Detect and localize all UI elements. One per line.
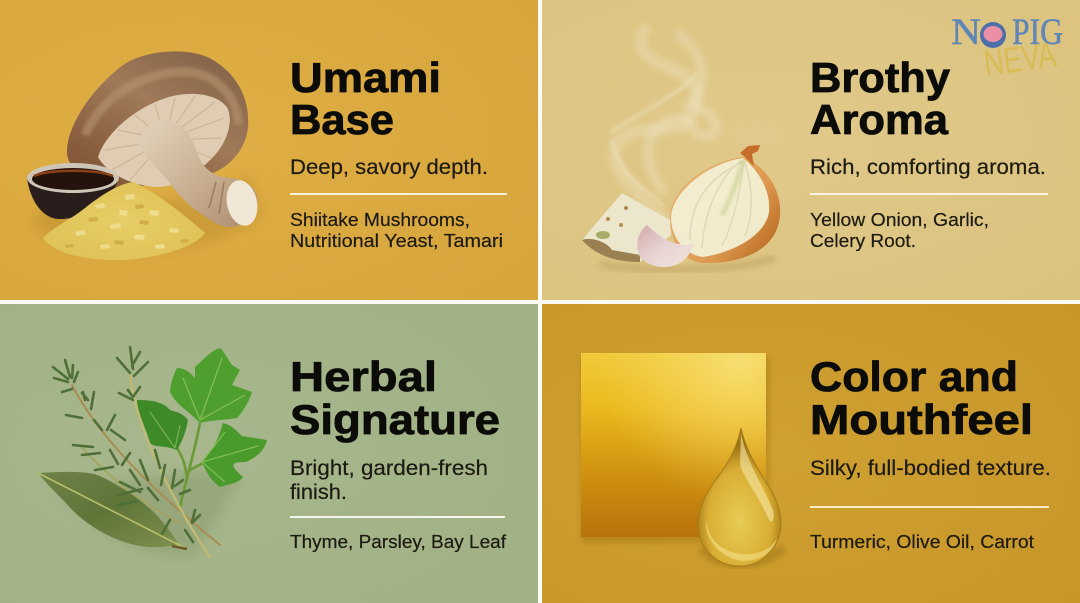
ingredients: Celery Root. [810, 231, 916, 251]
onion [670, 145, 780, 263]
heading: Herbal [290, 353, 437, 400]
mushroom cap [67, 51, 248, 190]
illustration: thyme, parsley and bay leaf [38, 347, 267, 557]
description: Bright, garden-fresh [290, 457, 488, 480]
ingredients: Yellow Onion, Garlic, [810, 210, 989, 230]
mushroom stem [137, 120, 257, 227]
logo: No Pig Neva: NEVA [981, 33, 1058, 84]
ingredients: Shiitake Mushrooms, [290, 210, 470, 230]
garlic clove [637, 225, 694, 267]
heading: Signature [290, 396, 500, 443]
description: finish. [290, 481, 347, 504]
thyme sprigs [53, 347, 220, 557]
description: Silky, full-bodied texture. [810, 457, 1051, 480]
panel: brothy aroma [542, 0, 1080, 300]
heading: Aroma [810, 96, 949, 143]
ingredients: Thyme, Parsley, Bay Leaf [290, 532, 507, 552]
heading [810, 353, 1033, 443]
bay leaf [38, 472, 178, 547]
logo: No Pig Neva [951, 12, 1063, 84]
heading: Mouthfeel [810, 396, 1033, 443]
parsley [137, 348, 267, 507]
illustration: shiitake mushroom, tamari bowl and yeast flakes [27, 51, 262, 260]
ingredients [810, 210, 989, 251]
heading [290, 54, 441, 143]
panel: umami base [0, 0, 538, 300]
heading: Brothy [810, 54, 951, 101]
panel: color and mouthfeel [542, 304, 1080, 603]
ingredients: Turmeric, Olive Oil, Carrot [810, 532, 1034, 552]
celery root [582, 193, 671, 262]
ingredients [290, 210, 503, 251]
illustration: steam, onion, celery root and garlic [582, 30, 780, 269]
logo: No Pig Neva: N [951, 12, 981, 53]
description: Deep, savory depth. [290, 156, 488, 179]
panel: herbal signature [0, 304, 538, 603]
olive oil drop [698, 428, 784, 566]
heading [290, 353, 500, 443]
logo: No Pig Neva: PIG [1012, 12, 1063, 53]
steam [612, 30, 716, 222]
heading: Umami [290, 54, 441, 101]
illustration: golden swatch and oil drop [581, 353, 784, 566]
mushroom gills [98, 94, 230, 187]
ingredients: Nutritional Yeast, Tamari [290, 231, 503, 251]
heading: Color and [810, 353, 1018, 400]
tamari bowl [27, 178, 119, 219]
color swatch [581, 353, 766, 537]
description: Rich, comforting aroma. [810, 156, 1046, 179]
nutritional yeast pile [43, 182, 205, 260]
heading: Base [290, 96, 394, 143]
description [290, 457, 488, 504]
heading [810, 54, 951, 143]
